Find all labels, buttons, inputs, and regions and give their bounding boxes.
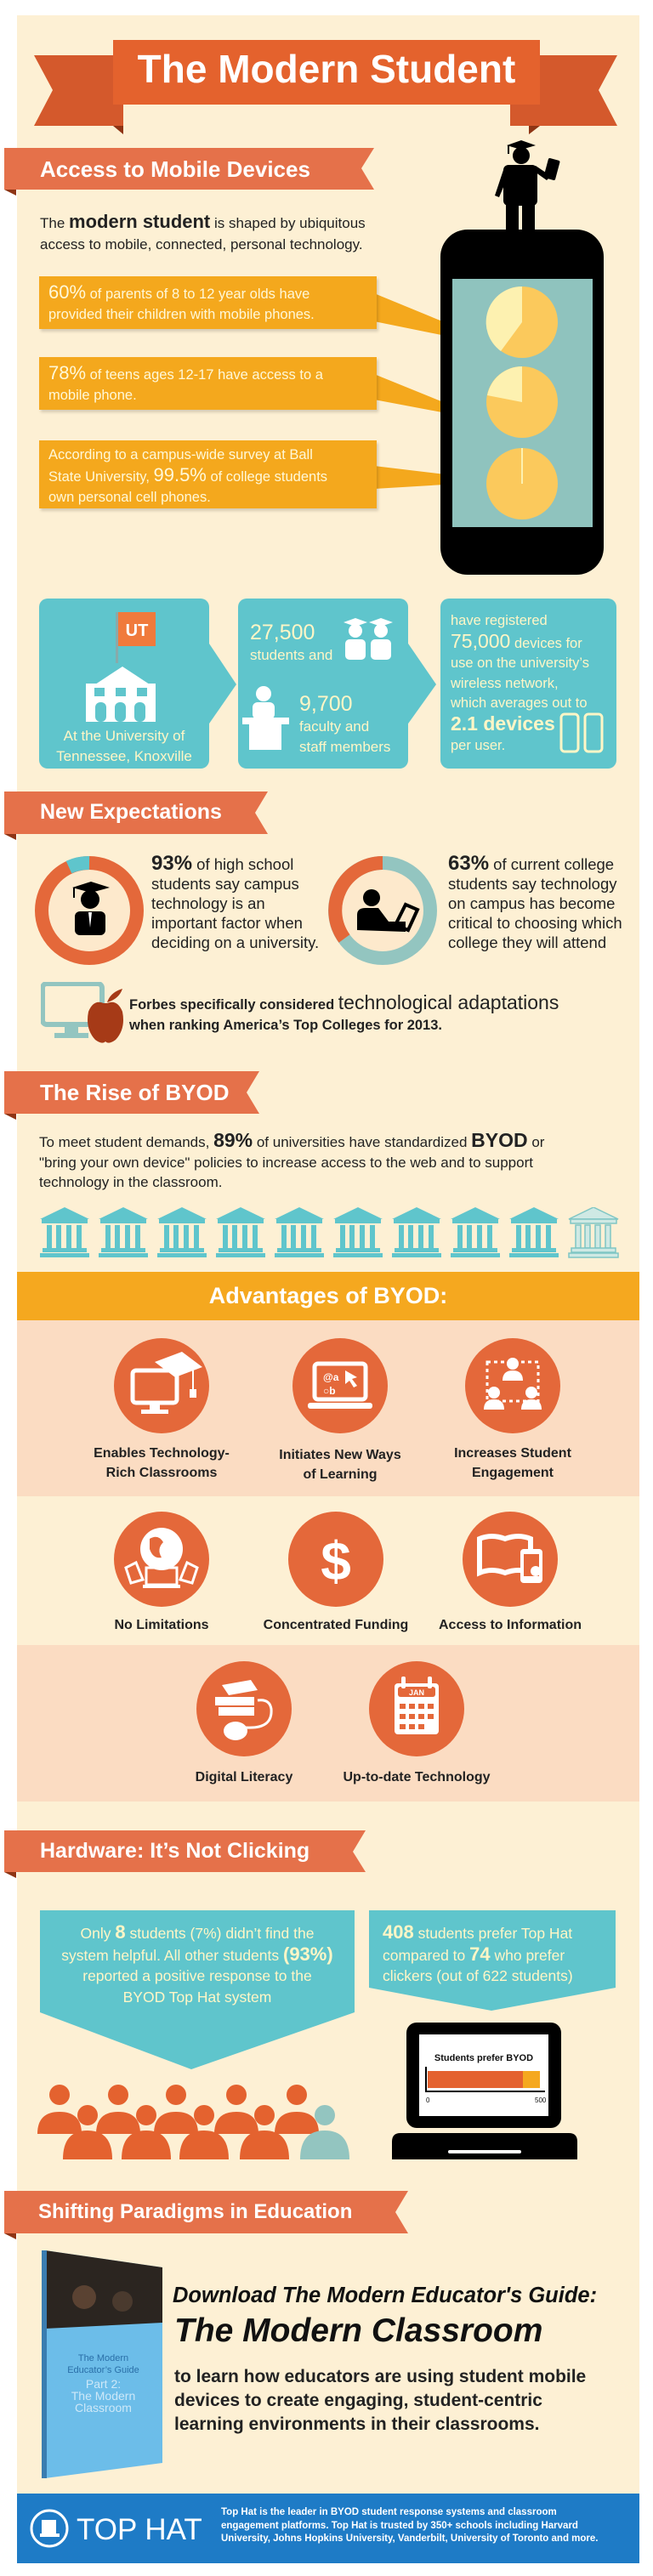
callout: 408 students: compared to 74 who prefer bbox=[383, 1943, 565, 1964]
heading ribbon: New Expectations: New Expectations bbox=[40, 800, 222, 824]
callout: 78%: mobile phone. bbox=[48, 388, 137, 403]
advantage: Enables Technology-Rich Classrooms: Rich Classrooms bbox=[106, 1466, 217, 1480]
panel: students and faculty bbox=[238, 599, 436, 769]
text: BYOD 89%: technology in the classroom. bbox=[39, 1174, 222, 1190]
text: Forbes: Forbes specifically considered technological adaptations bbox=[129, 991, 559, 1013]
panel: registered devices: 75,000 devices for bbox=[451, 629, 582, 651]
donut: 93% bbox=[35, 856, 144, 965]
panel: UT Knoxville: At the University of bbox=[64, 728, 185, 744]
callout: 99.5%: own personal cell phones. bbox=[48, 490, 211, 505]
icon: laptop chart: 500 bbox=[535, 2097, 547, 2104]
text: BYOD 89%: "bring your own device" policies to increase access to the web and to support bbox=[39, 1155, 533, 1170]
panel: UT Knoxville bbox=[39, 599, 236, 769]
title ribbon: The Modern Student bbox=[138, 47, 515, 91]
pie 60% bbox=[486, 287, 558, 358]
text: 93%: students say campus bbox=[151, 875, 299, 893]
callout: 408 students: 408 students prefer Top Hat bbox=[383, 1921, 572, 1943]
text: download guide: to learn how educators are using student mobile bbox=[174, 2367, 586, 2386]
callout: 408 students: clickers (out of 622 students) bbox=[383, 1967, 573, 1984]
logo: Top Hat: TOP HAT bbox=[77, 2513, 202, 2546]
book cover: Educator’s Guide bbox=[67, 2365, 139, 2375]
callout: 60%: 60% of parents of 8 to 12 year olds have bbox=[48, 281, 309, 303]
heading ribbon: Shifting Paradigms: Shifting Paradigms in Education bbox=[38, 2200, 352, 2223]
band backgrounds bbox=[17, 1320, 639, 1496]
pie 99.5% bbox=[486, 448, 558, 519]
heading ribbon: New Expectations bbox=[4, 792, 268, 840]
callout: 8 students: BYOD Top Hat system bbox=[123, 1988, 271, 2005]
callout: 8 students: reported a positive response to the bbox=[82, 1967, 312, 1984]
advantage: Increases Student Engagement bbox=[454, 1338, 571, 1480]
footer text: engagement platforms. Top Hat is trusted by 350+ schools including Harvard bbox=[221, 2520, 578, 2530]
callout: 60% bbox=[39, 276, 377, 329]
text: 63%: on campus has become bbox=[448, 894, 615, 912]
text: 63%: 63% of current college bbox=[448, 852, 614, 875]
icon: laptop chart: Students prefer BYOD bbox=[434, 2053, 533, 2063]
heading bar: Advantages of BYOD: Advantages of BYOD: bbox=[209, 1283, 447, 1308]
heading ribbon: The Rise of BYOD: The Rise of BYOD bbox=[40, 1080, 229, 1105]
advantage: Access to Information: Access to Information bbox=[439, 1618, 582, 1632]
advantage: Enables Technology-Rich Classrooms: Enables Technology- bbox=[94, 1446, 230, 1461]
callout pointers bbox=[377, 294, 440, 489]
panel: UT Knoxville: UT bbox=[126, 621, 148, 640]
text: download guide: The Modern Classroom bbox=[174, 2312, 542, 2349]
panel: registered devices: wireless network, bbox=[451, 675, 559, 690]
advantage: No Limitations: No Limitations bbox=[114, 1618, 209, 1632]
callout: 60%: provided their children with mobile phones. bbox=[48, 307, 315, 322]
panel: registered devices: per user. bbox=[451, 738, 505, 753]
text: 63%: college they will attend bbox=[448, 933, 606, 951]
title ribbon bbox=[34, 40, 617, 134]
text: 93%: important factor when bbox=[151, 914, 303, 932]
heading ribbon: Shifting Paradigms bbox=[4, 2191, 408, 2239]
heading ribbon: The Rise of BYOD bbox=[4, 1071, 259, 1120]
panel: students and faculty: students and bbox=[250, 647, 332, 663]
advantage: No Limitations bbox=[114, 1512, 209, 1632]
advantage: Initiates New Ways of Learning: ○b bbox=[323, 1385, 336, 1397]
book cover: Classroom bbox=[75, 2401, 132, 2414]
text: Forbes: when ranking America’s Top Colleges for 2013. bbox=[129, 1018, 442, 1033]
footer text bbox=[221, 2507, 598, 2544]
book cover bbox=[42, 2250, 162, 2478]
text: BYOD 89%: To meet student demands, 89% of universities have standardized BYOD or bbox=[39, 1129, 544, 1151]
icon: audience bbox=[37, 2085, 349, 2159]
text: Forbes bbox=[129, 991, 559, 1033]
text: 93%: technology is an bbox=[151, 894, 265, 912]
icon: student with phone bbox=[495, 140, 560, 230]
advantage: Concentrated Funding: Concentrated Funding bbox=[264, 1618, 408, 1632]
phone with pies bbox=[440, 140, 604, 575]
donut: 63% bbox=[328, 856, 437, 965]
text: 63%: students say technology bbox=[448, 875, 617, 893]
panel: registered devices: which averages out to bbox=[451, 695, 588, 711]
text: 63%: critical to choosing which bbox=[448, 914, 622, 932]
advantage: Initiates New Ways of Learning: of Learning bbox=[303, 1467, 378, 1482]
text: download guide: learning environments in their classrooms. bbox=[174, 2414, 539, 2434]
callout: 8 students bbox=[40, 1910, 355, 2069]
heading ribbon: Access to Mobile Devices: Access to Mobile Devices bbox=[40, 156, 310, 182]
advantage: Increases Student Engagement: Increases Student bbox=[454, 1446, 571, 1461]
book cover: The Modern bbox=[78, 2353, 128, 2363]
advantage: Initiates New Ways of Learning: Initiates New Ways bbox=[279, 1448, 401, 1462]
icon: monitor and apple bbox=[41, 982, 123, 1043]
advantage: Digital Literacy bbox=[196, 1661, 292, 1784]
pie 78% bbox=[486, 366, 558, 438]
panel: registered devices bbox=[440, 599, 616, 769]
panel: registered devices: have registered bbox=[451, 613, 548, 628]
advantage: Increases Student Engagement: Engagement bbox=[472, 1466, 554, 1480]
footer text: Top Hat is the leader in BYOD student response systems and classroom bbox=[221, 2507, 557, 2517]
panel: students and faculty: 9,700 bbox=[299, 692, 353, 716]
panel: registered devices: 2.1 devices bbox=[451, 712, 555, 735]
text: 63% bbox=[448, 852, 622, 951]
advantage: Digital Literacy: Digital Literacy bbox=[196, 1770, 292, 1784]
heading ribbon: Access to Mobile Devices bbox=[4, 148, 374, 196]
callout: 8 students: Only 8 students (7%) didn’t find the bbox=[81, 1921, 314, 1943]
advantage: Concentrated Funding bbox=[264, 1512, 408, 1632]
advantage: Initiates New Ways of Learning: @a bbox=[323, 1371, 339, 1383]
advantage: Initiates New Ways of Learning bbox=[279, 1338, 401, 1482]
callout: 408 students bbox=[369, 1910, 616, 2011]
callout: 99.5%: State University, 99.5% of college students bbox=[48, 464, 327, 485]
heading ribbon: Hardware bbox=[4, 1830, 366, 1878]
advantage: Up-to-date Technology: JAN bbox=[409, 1688, 424, 1697]
icon: laptop chart bbox=[392, 2023, 577, 2159]
callout: 8 students: system helpful. All other students (93%) bbox=[61, 1943, 333, 1964]
heading bar: Advantages of BYOD bbox=[17, 1272, 639, 1320]
text: 93% bbox=[151, 852, 319, 951]
intro text: access to mobile, connected, personal technology. bbox=[40, 236, 363, 252]
logo: Top Hat bbox=[31, 2510, 202, 2547]
heading ribbon: Hardware: Hardware: It’s Not Clicking bbox=[40, 1839, 309, 1863]
advantage: Access to Information bbox=[439, 1512, 582, 1632]
panel: students and faculty: faculty and bbox=[299, 718, 369, 735]
callout: 99.5% bbox=[39, 440, 377, 508]
icon: laptop chart: 0 bbox=[426, 2097, 430, 2104]
text: download guide: Download The Modern Educator's Guide: bbox=[173, 2284, 597, 2307]
panel: students and faculty: staff members bbox=[299, 739, 390, 755]
advantage: Enables Technology-Rich Classrooms bbox=[94, 1338, 230, 1480]
intro text bbox=[40, 211, 366, 252]
text: download guide: devices to create engaging, student-centric bbox=[174, 2391, 542, 2410]
footer text: University, Johns Hopkins University, Vanderbilt, University of Toronto and more. bbox=[221, 2533, 598, 2544]
panel: UT Knoxville: Tennessee, Knoxville bbox=[56, 748, 192, 764]
icon row: universities bbox=[40, 1207, 619, 1258]
book cover: The Modern bbox=[71, 2389, 135, 2403]
callout: 78%: 78% of teens ages 12-17 have access to a bbox=[48, 362, 323, 383]
footer bbox=[17, 2494, 639, 2563]
callout: 99.5%: According to a campus-wide survey at Ball bbox=[48, 447, 313, 462]
advantage: Up-to-date Technology: Up-to-date Technology bbox=[343, 1770, 491, 1784]
text: download guide bbox=[173, 2284, 597, 2434]
advantage: Up-to-date Technology bbox=[343, 1661, 491, 1784]
book cover: Part 2: bbox=[86, 2377, 121, 2391]
panel: registered devices: use on the university’s bbox=[451, 655, 589, 671]
text: BYOD 89% bbox=[39, 1129, 544, 1190]
advantage: Concentrated Funding: $ bbox=[321, 1530, 351, 1592]
text: 93%: deciding on a university. bbox=[151, 933, 319, 951]
text: 93%: 93% of high school bbox=[151, 852, 293, 875]
panel: students and faculty: 27,500 bbox=[250, 621, 315, 644]
callout: 78% bbox=[39, 357, 377, 410]
intro text: The modern student is shaped by ubiquitous bbox=[40, 211, 366, 232]
